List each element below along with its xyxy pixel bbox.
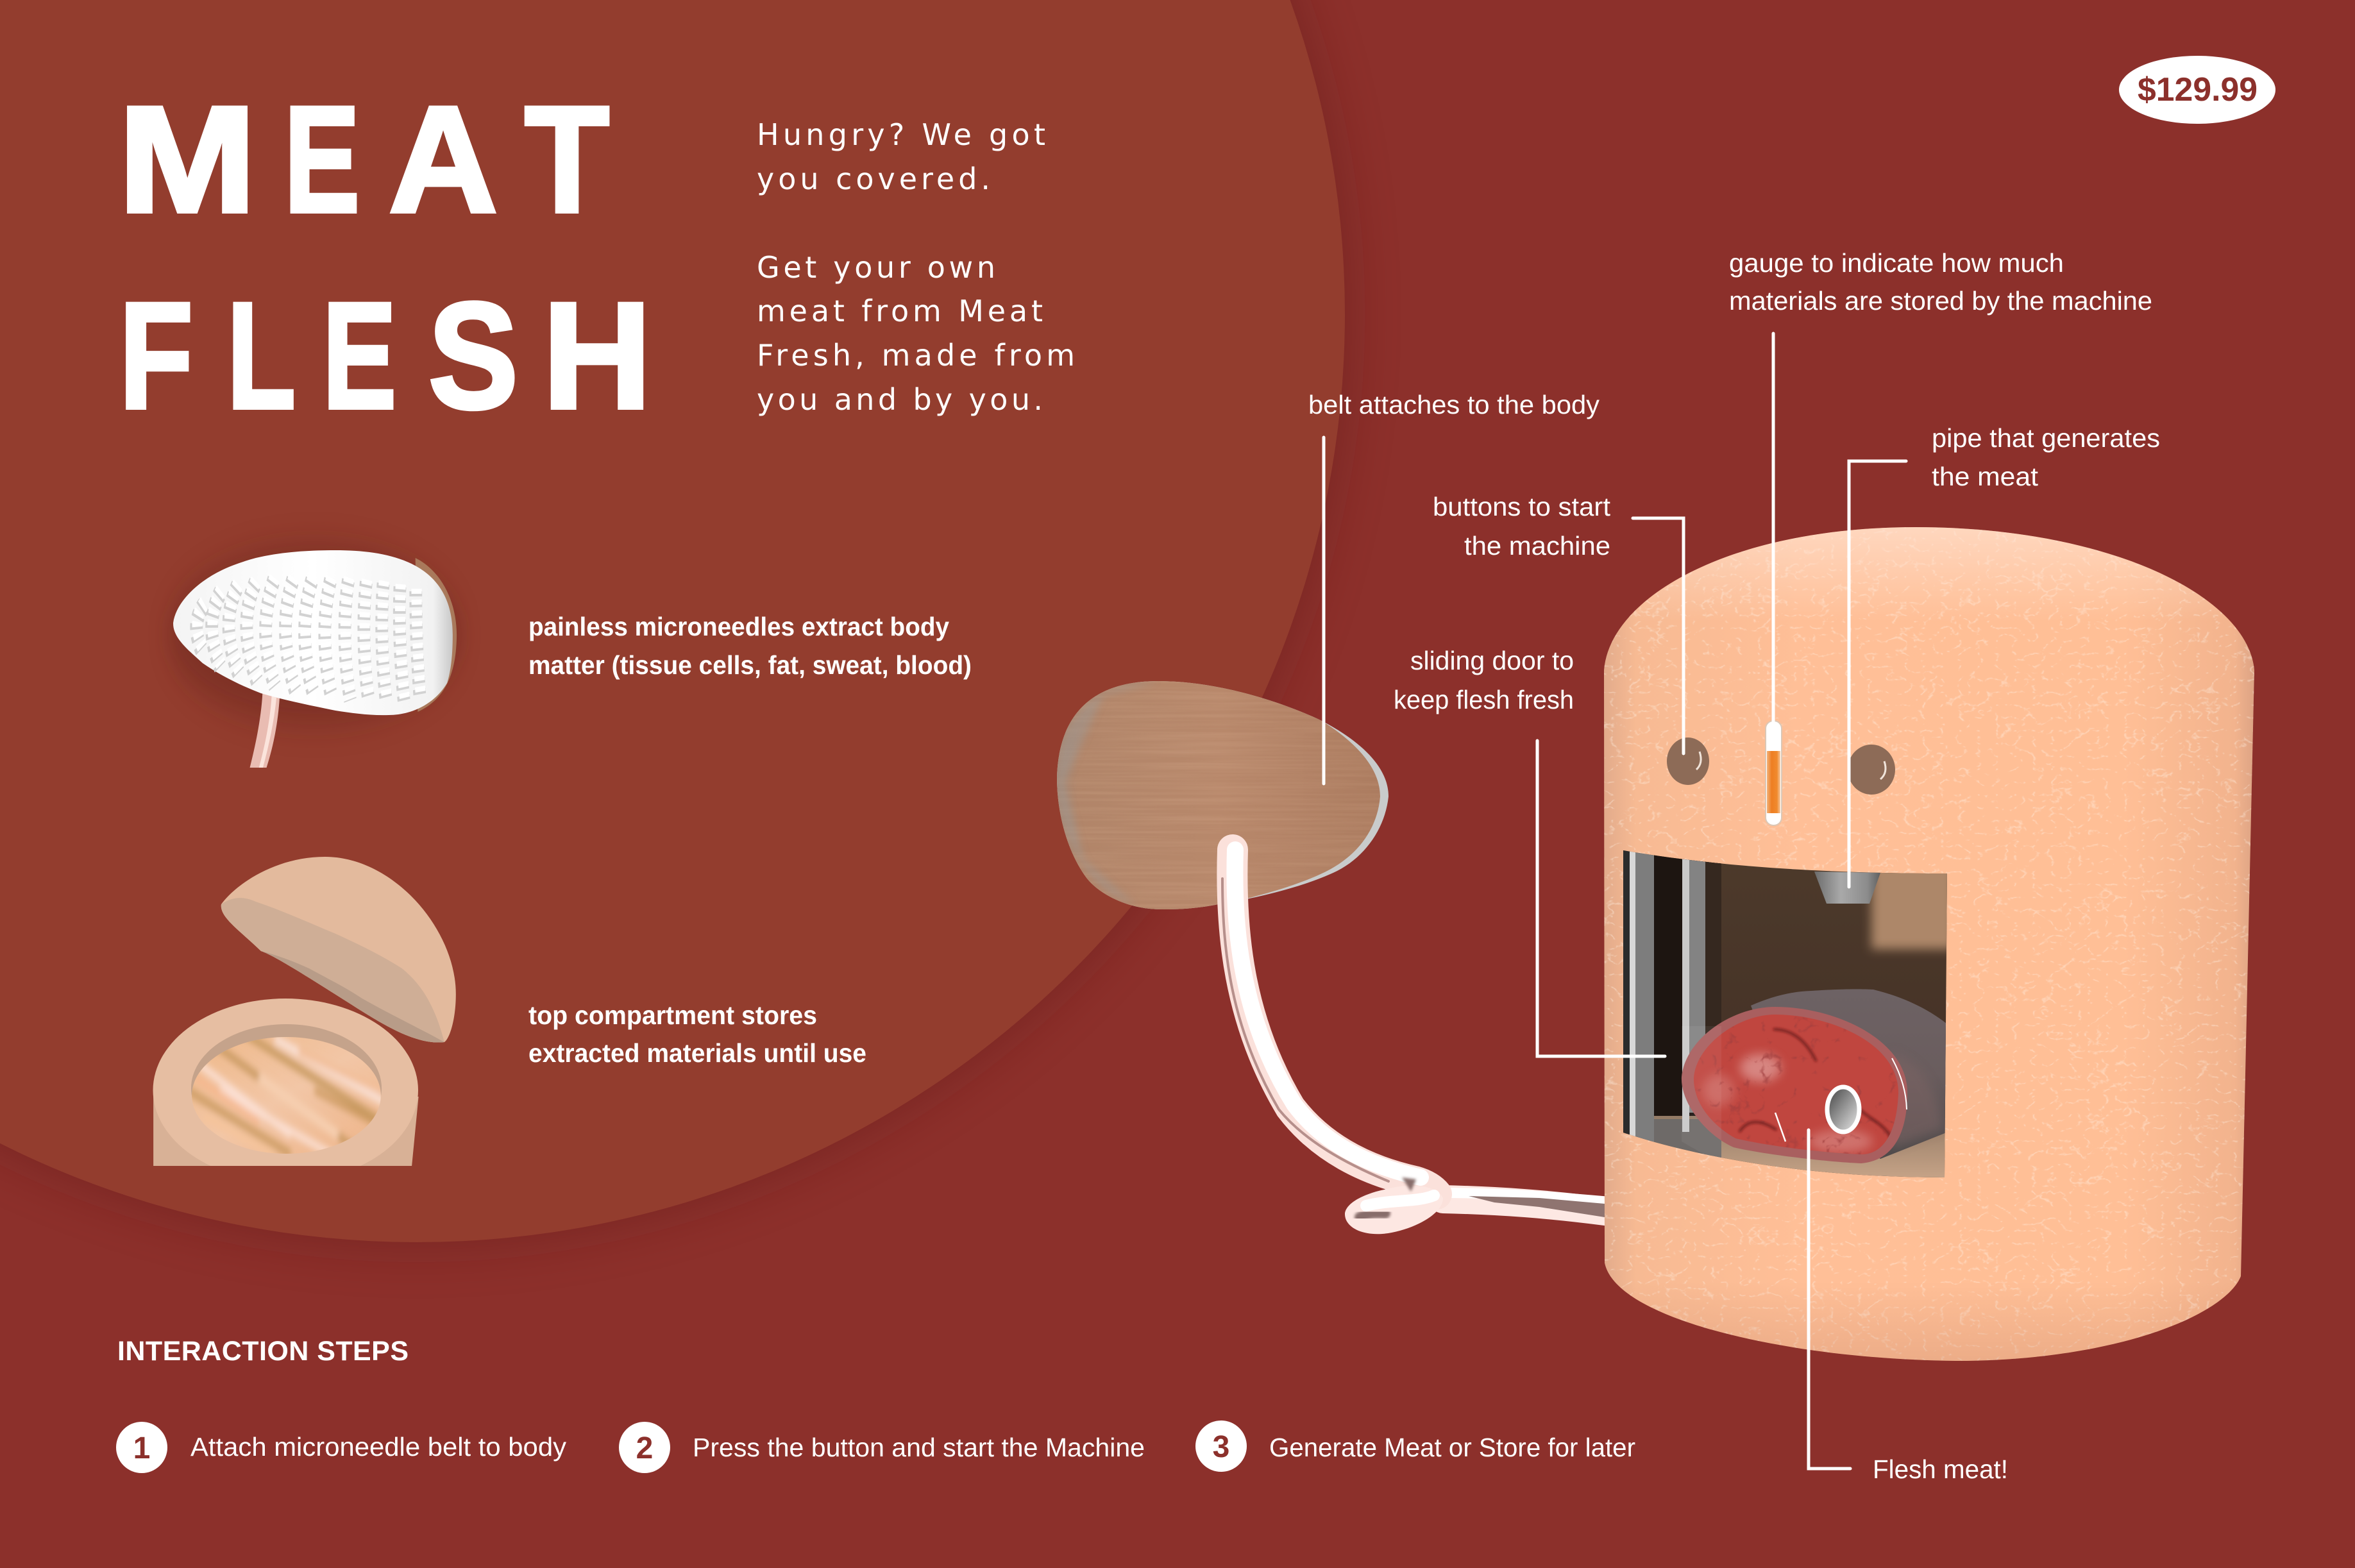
background circle panel (0, 0, 1345, 1242)
title: A (389, 75, 498, 244)
step 1: 1 (133, 1431, 150, 1465)
compartment base (153, 999, 419, 1182)
sliding door glass (1623, 847, 1630, 1135)
title: M (118, 75, 257, 244)
translucent door overlay (1682, 1026, 1721, 1164)
label: belt: belt attaches to the body (1308, 390, 1600, 419)
leader line: belt (1322, 437, 1325, 784)
leader line: gauge (1771, 333, 1775, 722)
title: E (323, 271, 396, 441)
machine window (1623, 847, 1955, 1180)
grey floor under door (1623, 1119, 1721, 1158)
compartment caption: top compartment stores (528, 1000, 817, 1030)
label: buttons: the machine (1464, 531, 1610, 561)
circle shadow (0, 0, 1348, 1245)
title: E (284, 75, 360, 244)
label: pipe (1932, 423, 2160, 491)
icon: top compartment (153, 857, 456, 1182)
step 3 (1195, 1420, 1635, 1472)
tagline text block: Fresh, made from (757, 338, 1075, 373)
icon: microneedle pad (167, 545, 461, 768)
tube (1222, 850, 1610, 1234)
label: pipe: pipe that generates (1932, 423, 2160, 453)
step 3: 3 (1213, 1430, 1229, 1464)
microneedle caption: painless microneedles extract body (528, 612, 949, 641)
title: L (227, 271, 296, 441)
compartment caption: extracted materials until use (528, 1038, 866, 1068)
label: sliding door (1394, 646, 1574, 714)
step 1 (116, 1422, 567, 1473)
machine button right (1848, 745, 1895, 795)
heading: interaction steps: INTERACTION STEPS (117, 1336, 409, 1367)
tagline text block (757, 117, 1075, 417)
microneedle caption: matter (tissue cells, fat, sweat, blood) (528, 650, 972, 680)
step 2: 2 (636, 1431, 653, 1465)
label: gauge (1729, 248, 2152, 316)
meat sack back (1751, 989, 1950, 1159)
tagline text block: Hungry? We got (757, 117, 1045, 152)
label: sliding door: keep flesh fresh (1394, 685, 1574, 714)
nozzle (1814, 872, 1880, 904)
compartment caption (528, 1000, 866, 1068)
leader line: flesh (1809, 1130, 1850, 1469)
leader line: sliding door (1537, 741, 1665, 1056)
machine button left (1667, 738, 1709, 785)
label: pipe: the meat (1932, 462, 2039, 491)
label: gauge: gauge to indicate how much (1729, 248, 2064, 278)
window floor (1654, 1116, 1945, 1177)
step 2 (619, 1422, 1145, 1473)
icon: belt (1052, 677, 1392, 914)
dark door interior (1654, 850, 1721, 1116)
material gauge (1766, 721, 1782, 825)
compartment lid (221, 857, 456, 1043)
step 3: Generate Meat or Store for later (1269, 1433, 1635, 1462)
title: H (543, 271, 652, 441)
leader line: pipe (1849, 461, 1906, 887)
label: buttons (1433, 492, 1611, 561)
meat cross-section (1680, 1000, 1911, 1167)
title (118, 75, 652, 441)
label: sliding door: sliding door to (1410, 646, 1574, 675)
step 2: Press the button and start the Machine (693, 1433, 1145, 1462)
label: buttons: buttons to start (1433, 492, 1611, 521)
tagline text block: meat from Meat (757, 294, 1043, 328)
label: flesh meat: Flesh meat! (1873, 1454, 2008, 1484)
machine body (1597, 519, 2264, 1366)
tagline text block: you covered. (757, 162, 990, 196)
leader line: buttons (1633, 518, 1684, 754)
microneedle caption (528, 612, 972, 680)
tagline text block: Get your own (757, 250, 995, 285)
step 1: Attach microneedle belt to body (190, 1432, 567, 1462)
back wall light patch (1871, 859, 1955, 949)
title: T (525, 75, 609, 244)
price tag (2119, 56, 2275, 124)
price tag: $129.99 (2138, 71, 2258, 108)
tagline text block: you and by you. (757, 382, 1043, 417)
title: F (119, 271, 193, 441)
title: S (428, 271, 518, 441)
label: gauge: materials are stored by the machine (1729, 286, 2152, 316)
